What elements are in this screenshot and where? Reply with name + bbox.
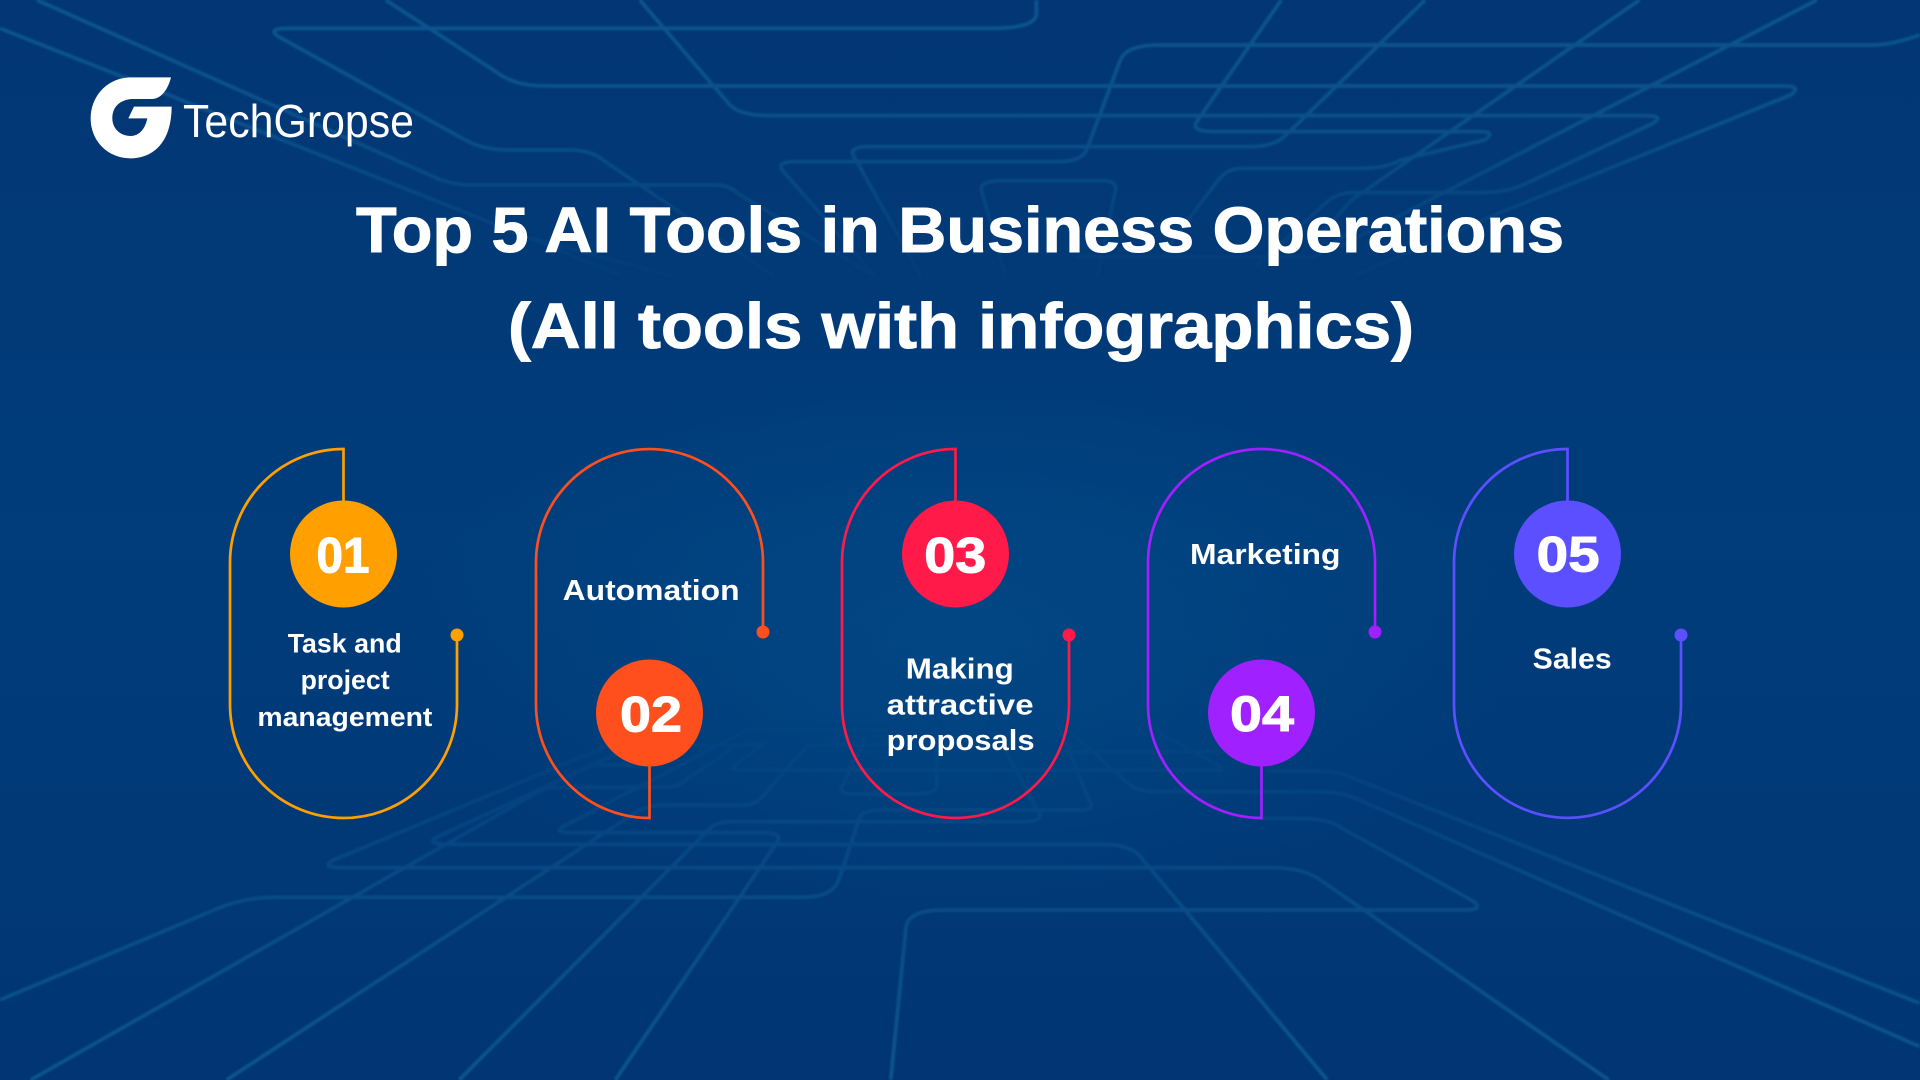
label: Task and xyxy=(288,629,402,659)
logo: TechGropse xyxy=(91,77,414,158)
background circuit lines: bottom xyxy=(0,788,1920,1080)
number badge 01: 01 xyxy=(316,528,370,584)
number badge 05 xyxy=(1514,500,1621,608)
number badge 05: 05 xyxy=(1537,526,1600,582)
end dot xyxy=(1674,628,1688,642)
panel: 05 sales xyxy=(1454,449,1688,818)
logo wordmark: TechGropse xyxy=(183,95,414,147)
number badge 03 xyxy=(902,500,1009,608)
label: management xyxy=(257,702,432,732)
label: project xyxy=(301,665,390,695)
end dot xyxy=(756,626,770,638)
pill outline xyxy=(1454,449,1681,818)
panel: 01 task and project management xyxy=(230,449,464,818)
title: Top 5 AI Tools in Business Operations xyxy=(356,194,1564,266)
pill outline xyxy=(1148,449,1375,818)
title: (All tools with infographics) xyxy=(508,290,1414,362)
pill outline xyxy=(536,449,763,818)
label: Making xyxy=(906,653,1014,685)
title xyxy=(356,194,1564,362)
background circuit lines: top xyxy=(0,0,1920,232)
label: Marketing xyxy=(1190,539,1340,571)
number badge 03: 03 xyxy=(924,528,986,584)
end dot xyxy=(450,628,464,642)
number badge 01 xyxy=(290,500,397,608)
number badge 04 xyxy=(1208,660,1315,766)
end dot xyxy=(1368,626,1382,638)
panel: 04 marketing xyxy=(1148,449,1382,818)
label: Automation xyxy=(563,575,740,607)
panel: 02 automation xyxy=(536,449,770,818)
number badge 04: 04 xyxy=(1230,686,1294,742)
pill outline xyxy=(842,449,1069,818)
label: Sales xyxy=(1533,644,1612,676)
label: attractive xyxy=(887,689,1034,721)
number badge 02 xyxy=(596,660,703,766)
icon: G mark xyxy=(91,77,172,158)
label: proposals xyxy=(887,725,1035,757)
panel: 03 making attractive proposals xyxy=(842,449,1076,818)
end dot xyxy=(1062,628,1076,642)
number badge 02: 02 xyxy=(620,686,682,742)
pill outline xyxy=(230,449,457,818)
